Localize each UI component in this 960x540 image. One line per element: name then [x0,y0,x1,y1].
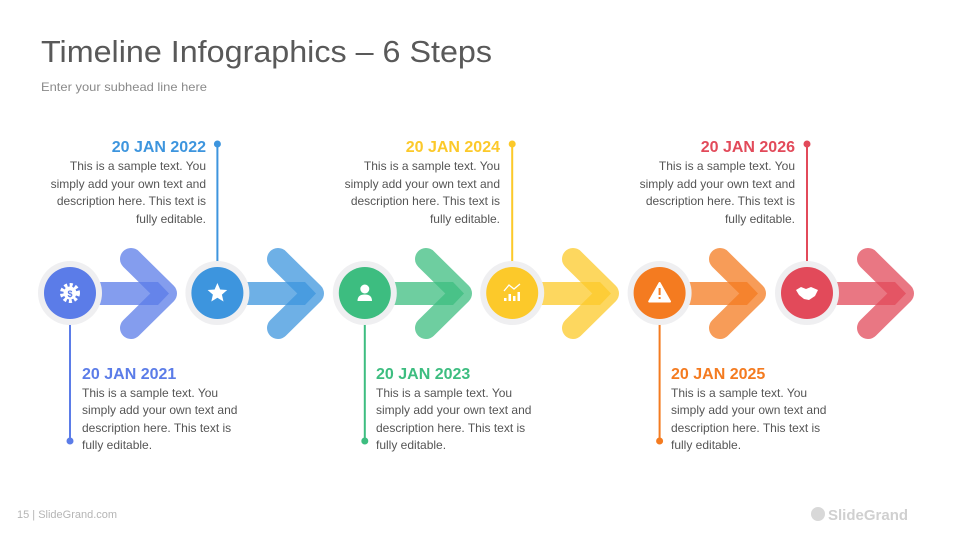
text block 2026: fully editable. [725,212,795,226]
icon circle: handshake [775,261,839,325]
text block 2022: This is a sample text. You [70,159,206,173]
text block 2024: simply add your own text and [345,177,500,191]
arrow 4 [538,259,611,328]
text block 2023: This is a sample text. You [376,386,512,400]
text block 2026: 20 JAN 2026 [701,139,795,156]
icon circle: star [185,261,249,325]
icon circle: warning [628,261,692,325]
text block 2024: description here. This text is [351,194,500,208]
text block 2023: 20 JAN 2023 [376,366,470,383]
text block 2023 [376,366,531,452]
title: Timeline Infographics – 6 Steps [41,34,492,69]
text block 2022: 20 JAN 2022 [112,139,206,156]
icon circle: user [333,261,397,325]
footer logo: SlideGrand [828,507,908,524]
text block 2025: description here. This text is [671,421,820,435]
icon circle: gear [38,261,102,325]
text block 2025 [671,366,826,452]
text block 2023: description here. This text is [376,421,525,435]
step 1: 2021 blue [38,259,237,452]
text block 2025: 20 JAN 2025 [671,366,765,383]
text block 2021: fully editable. [82,438,152,452]
text block 2024: 20 JAN 2024 [406,139,500,156]
text block 2025: fully editable. [671,438,741,452]
text block 2022: description here. This text is [57,194,206,208]
text block 2026: simply add your own text and [640,177,795,191]
text block 2023: fully editable. [376,438,446,452]
icon circle: gear: $ [67,289,73,299]
text block 2022 [51,139,206,226]
text block 2021 [82,366,237,452]
arrow 6 [833,259,906,328]
text block 2024: fully editable. [430,212,500,226]
text block 2021: This is a sample text. You [82,386,218,400]
text block 2025: This is a sample text. You [671,386,807,400]
arrow 2 [243,259,316,328]
text block 2021: simply add your own text and [82,403,237,417]
arrow 3 [391,259,464,328]
text block 2025: simply add your own text and [671,403,826,417]
text block 2022: simply add your own text and [51,177,206,191]
icon circle: chart [480,261,544,325]
arrow 1 [96,259,169,328]
text block 2026: This is a sample text. You [659,159,795,173]
text block 2026: description here. This text is [646,194,795,208]
text block 2021: description here. This text is [82,421,231,435]
step 5: 2025 orange [628,259,826,452]
step 6: 2026 red [640,139,906,328]
step 4: 2024 yellow [345,139,611,328]
text block 2023: simply add your own text and [376,403,531,417]
step 2: 2022 [51,139,316,328]
text block 2024 [345,139,500,226]
footer page number: 15 | SlideGrand.com [17,509,117,521]
text block 2022: fully editable. [136,212,206,226]
step 3: 2023 green [333,259,531,452]
arrow 5 [685,259,758,328]
text block 2026 [640,139,795,226]
subhead: Enter your subhead line here [41,80,207,94]
text block 2024: This is a sample text. You [364,159,500,173]
text block 2021: 20 JAN 2021 [82,366,176,383]
